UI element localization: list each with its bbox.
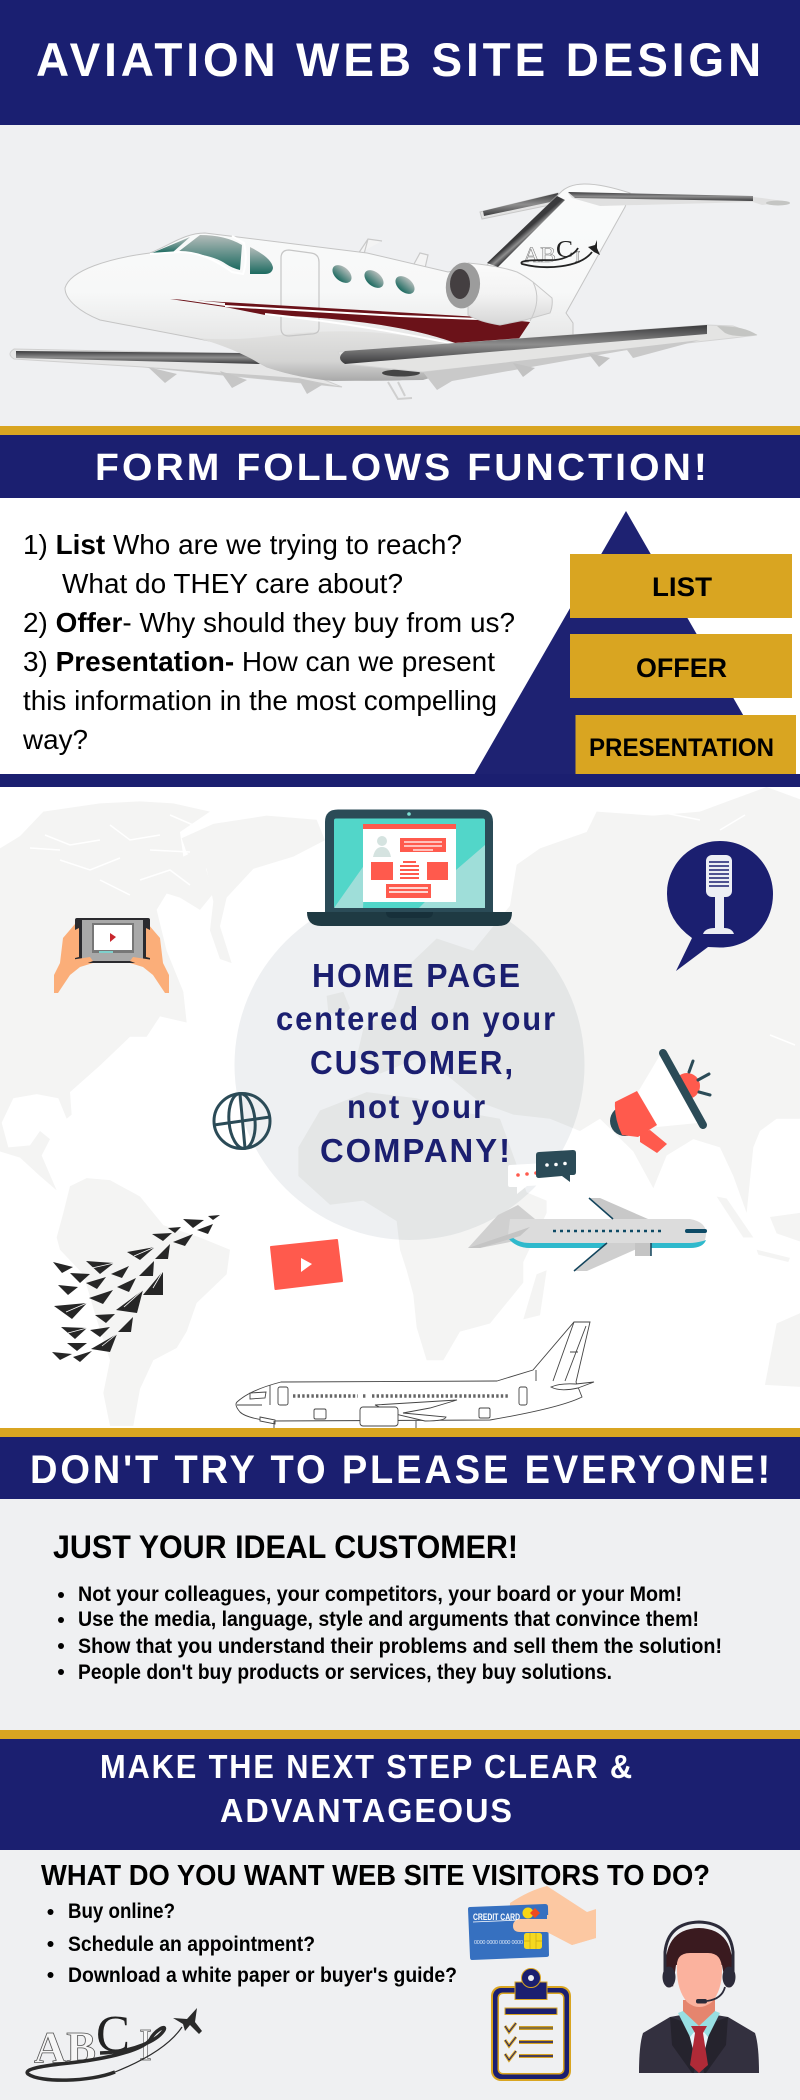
subheading: JUST YOUR IDEAL CUSTOMER! xyxy=(53,1529,518,1565)
world map background xyxy=(0,787,800,1426)
panel: header xyxy=(0,0,800,125)
text block: list offer presentation: 2) Offer- Why should they buy from us? xyxy=(23,607,515,638)
logo: ABCI xyxy=(27,2006,202,2080)
heading: DON'T TRY TO PLEASE EVERYONE! xyxy=(30,1448,773,1492)
text block: list offer presentation: this information in the most compelling xyxy=(23,685,497,716)
tail logo: AB xyxy=(523,242,556,267)
heading: home page centered on your customer: not your xyxy=(347,1088,487,1125)
heading: ADVANTAGEOUS xyxy=(220,1792,514,1829)
tail logo: I xyxy=(575,249,580,266)
panel: don't try to please everyone xyxy=(0,1428,800,1730)
heading xyxy=(100,1748,634,1829)
left stabilizer xyxy=(480,193,560,219)
pyramid label: presentation: PRESENTATION xyxy=(589,734,774,762)
icon: globe xyxy=(214,1092,270,1150)
red stripes xyxy=(170,299,530,343)
icon: flying jet xyxy=(468,1198,706,1271)
icon: red video button xyxy=(271,1240,342,1289)
panel: home page map xyxy=(0,787,800,1428)
icon: hand with credit card: CREDIT CARD xyxy=(473,1912,520,1922)
icon: hand with credit card: 0000 0000 0000 0000 xyxy=(474,1940,523,1946)
cockpit windows xyxy=(152,237,190,253)
antennas xyxy=(358,239,428,268)
left wing xyxy=(10,349,342,387)
door xyxy=(281,250,319,336)
logo: ABCI: C xyxy=(96,2006,130,2063)
pyramid label: list: LIST xyxy=(652,572,713,602)
tail logo xyxy=(521,237,600,267)
heading: home page centered on your customer: COMPANY! xyxy=(320,1132,512,1169)
icon: chat bubbles xyxy=(508,1150,576,1194)
engine xyxy=(468,263,552,325)
icon: private jet xyxy=(10,184,790,399)
pyramid label: offer xyxy=(570,634,792,698)
centre circle xyxy=(234,890,584,1240)
heading: home page centered on your customer: CUSTOMER, xyxy=(310,1044,515,1081)
text block: list offer presentation: way? xyxy=(22,724,88,755)
bullet list: Not your colleagues, your competitors, your board or your Mom! xyxy=(78,1583,682,1606)
tail leading edge and stabilizer xyxy=(487,196,565,267)
icon: clipboard checklist xyxy=(491,1968,571,2081)
panel: jet illustration xyxy=(0,125,800,426)
panel: next step xyxy=(0,1730,800,2100)
pyramid label: offer: OFFER xyxy=(636,653,727,683)
icon: airliner outline xyxy=(236,1322,594,1428)
icon: hand with credit card xyxy=(468,1886,596,1960)
bullet list: Download a white paper or buyer's guide? xyxy=(68,1964,457,1987)
bullet list: Schedule an appointment? xyxy=(68,1933,315,1956)
cabin windows xyxy=(329,262,355,286)
bullet list xyxy=(48,1900,457,1987)
heading: FORM FOLLOWS FUNCTION! xyxy=(95,447,710,489)
icon: microphone speech bubble xyxy=(667,841,773,971)
icon: customer service agent xyxy=(639,1922,759,2073)
title: AVIATION WEB SITE DESIGN xyxy=(36,33,765,86)
bullet list: Show that you understand their problems and sell them the solution! xyxy=(78,1635,722,1658)
text block: list offer presentation: 1) List Who are we trying to reach? xyxy=(23,529,462,560)
map inside circle xyxy=(0,787,800,1426)
text block: list offer presentation: 3) Presentation- How can we present xyxy=(23,646,495,677)
right wing xyxy=(338,325,757,372)
pyramid label: presentation xyxy=(576,715,796,774)
tail logo: C xyxy=(556,237,573,263)
pyramid xyxy=(474,511,777,774)
icon: megaphone xyxy=(610,1053,710,1153)
text block: list offer presentation xyxy=(22,529,515,755)
logo: ABCI: I xyxy=(139,2019,152,2070)
landing gear xyxy=(388,382,412,399)
heading: home page centered on your customer xyxy=(276,957,557,1169)
belly xyxy=(197,331,520,381)
pyramid label: list xyxy=(570,554,792,618)
text block: list offer presentation: What do THEY care about? xyxy=(62,568,403,599)
icon: flock of paper planes xyxy=(52,1215,220,1362)
heading: MAKE THE NEXT STEP CLEAR & xyxy=(100,1748,634,1785)
panel: form follows function xyxy=(0,426,800,787)
bullet list xyxy=(58,1583,722,1684)
logo: ABCI: AB xyxy=(34,2023,96,2072)
bullet list: People don't buy products or services, they buy solutions. xyxy=(78,1661,612,1684)
icon: laptop xyxy=(307,810,512,926)
bullet list: Buy online? xyxy=(68,1900,175,1923)
canadian arctic gaps xyxy=(30,812,795,1045)
heading: home page centered on your customer: HOME PAGE xyxy=(312,957,522,994)
heading: home page centered on your customer: centered on your xyxy=(276,1000,557,1037)
bullet list: Use the media, language, style and arguments that convince them! xyxy=(78,1608,699,1631)
subheading: WHAT DO YOU WANT WEB SITE VISITORS TO DO? xyxy=(41,1860,710,1892)
icon: hands holding tablet xyxy=(54,918,169,993)
fuselage xyxy=(65,184,630,380)
